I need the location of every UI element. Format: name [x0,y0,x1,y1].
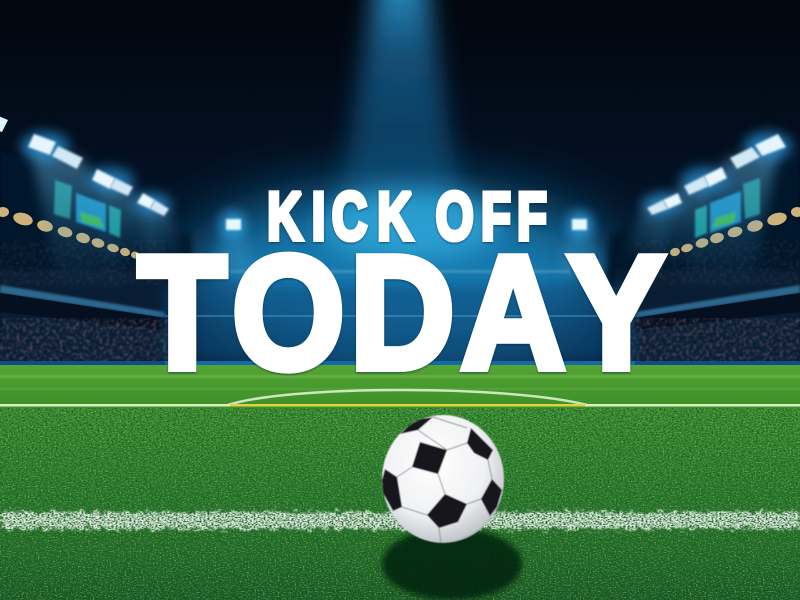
right stand [600,150,800,373]
right scoreboard [695,178,760,238]
background: bright glow behind heading [320,190,500,260]
mid floodlight left [212,211,256,275]
ball shadow [382,528,522,600]
right floodlights [620,132,792,290]
heading: kick off: KICK OFF [267,178,547,254]
halfway line [0,404,800,406]
title [138,178,665,403]
central spotlight beam [330,0,470,260]
left stand [0,150,200,373]
mid floodlight right [559,211,603,275]
left LED ribbon [0,207,140,259]
background: night sky [0,0,800,375]
background: central stadium glow [185,190,615,360]
centre circle marking [228,390,587,405]
heading: today: TODAY [138,223,665,403]
grass texture [0,408,800,600]
touchline [0,512,800,529]
centre stand [165,270,635,369]
pitch [0,365,800,600]
left floodlights [0,115,190,290]
right LED ribbon [669,207,800,257]
icon: soccer ball [382,415,504,543]
left scoreboard [54,180,121,238]
